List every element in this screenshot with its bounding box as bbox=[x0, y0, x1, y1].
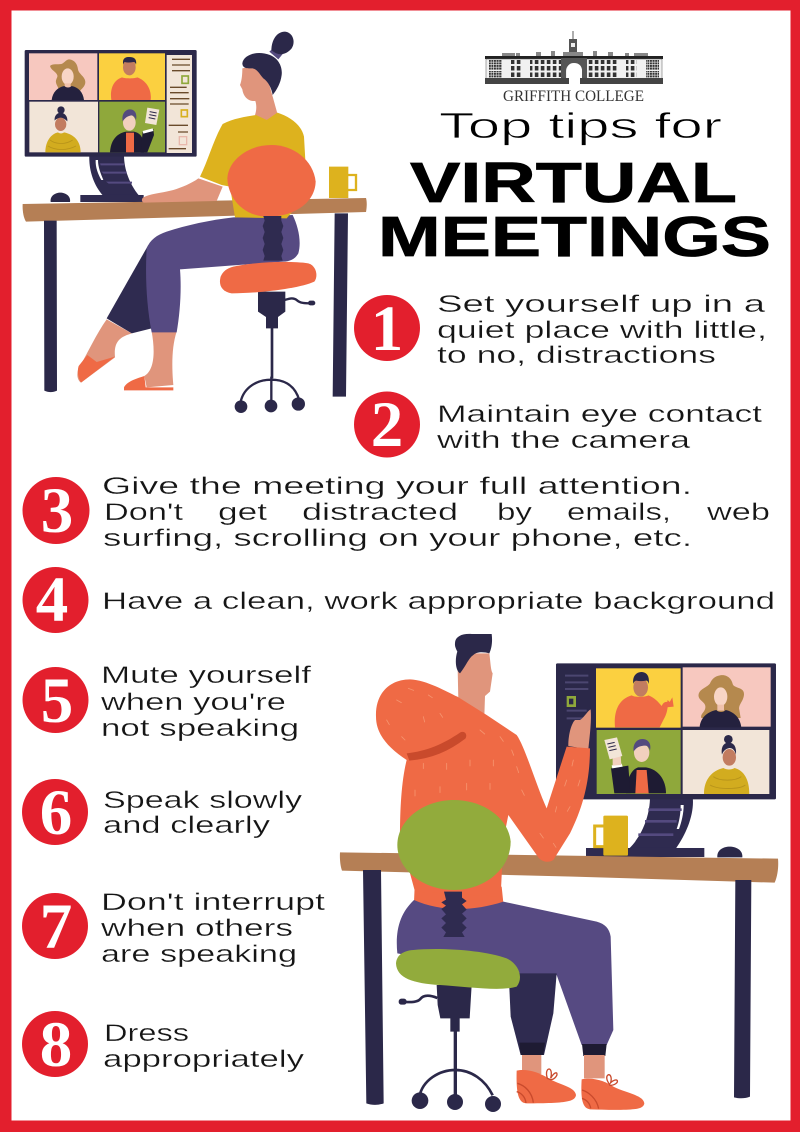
tip 8 bbox=[22, 1009, 304, 1081]
tip 1 text: quiet place with little, bbox=[437, 317, 767, 344]
number badge 5: 5 bbox=[41, 665, 73, 737]
tip 3 text: distracted bbox=[302, 499, 458, 526]
tip 3 bbox=[22, 473, 770, 552]
tip 2 text: with the camera bbox=[436, 427, 691, 454]
chair bbox=[396, 892, 520, 1112]
tip 5 text: not speaking bbox=[101, 715, 299, 742]
tip 7 text bbox=[100, 889, 325, 968]
number badge 8 bbox=[22, 1009, 88, 1081]
illustration: woman at desk on video call bbox=[23, 32, 367, 413]
number badge 7 bbox=[22, 891, 88, 963]
tip 1 bbox=[354, 291, 767, 369]
icon: mouse bbox=[717, 847, 742, 857]
tip 2 text bbox=[436, 401, 762, 454]
tip 3 text: surfing, scrolling on your phone, etc. bbox=[103, 525, 692, 552]
tip 7 text: when others bbox=[100, 915, 293, 942]
number badge 2: 2 bbox=[371, 389, 403, 461]
icon: college building bbox=[485, 31, 663, 84]
tip 3 text: get bbox=[218, 499, 267, 526]
number badge 4: 4 bbox=[36, 564, 68, 636]
number badge 1: 1 bbox=[371, 293, 403, 365]
tip 1 text bbox=[437, 291, 767, 369]
tip 8 text: appropriately bbox=[103, 1046, 304, 1073]
tip 3 text bbox=[102, 473, 770, 552]
number badge 3: 3 bbox=[41, 475, 73, 547]
icon: mouse bbox=[51, 193, 70, 202]
number badge 4 bbox=[22, 564, 88, 636]
title line: MEETINGS: MEETINGS bbox=[378, 205, 771, 269]
chair bbox=[220, 216, 316, 413]
tip 7 text: Don't interrupt bbox=[101, 889, 325, 916]
tip 1 text: Set yourself up in a bbox=[437, 291, 766, 318]
tip 6 text bbox=[103, 787, 302, 839]
tip 6 bbox=[22, 777, 302, 849]
tip 3 text: Don't bbox=[104, 499, 183, 526]
title line: Top tips for: Top tips for bbox=[439, 105, 722, 146]
number badge 5 bbox=[22, 665, 88, 737]
tip 8 text bbox=[103, 1020, 304, 1073]
tip 3 text: by bbox=[497, 499, 532, 526]
number badge 6 bbox=[22, 777, 88, 849]
tip 3 text: emails, bbox=[567, 499, 671, 526]
tip 4 bbox=[22, 564, 775, 636]
icon: monitor stand bbox=[80, 155, 144, 202]
icon: monitor with video call bbox=[556, 663, 776, 799]
tip 3 text: web bbox=[706, 499, 770, 526]
tip 5 text bbox=[100, 662, 311, 742]
tip 2 text: Maintain eye contact bbox=[437, 401, 762, 428]
tip 5 bbox=[22, 662, 311, 742]
woman figure bbox=[77, 32, 316, 390]
icon: desk bbox=[340, 852, 778, 1105]
illustration: man at desk on video call bbox=[340, 634, 778, 1112]
title bbox=[378, 105, 771, 269]
logo wordmark: GRIFFITH COLLEGE bbox=[503, 88, 644, 105]
tip 4 text: Have a clean, work appropriate background bbox=[102, 588, 775, 615]
logo: Griffith College bbox=[485, 31, 663, 105]
number badge 8: 8 bbox=[40, 1009, 72, 1081]
number badge 7: 7 bbox=[40, 891, 72, 963]
title line: VIRTUAL: VIRTUAL bbox=[410, 151, 737, 215]
tip 5 text: Mute yourself bbox=[101, 662, 311, 689]
icon: monitor with video call bbox=[25, 50, 197, 157]
tip 1 text: to no, distractions bbox=[437, 342, 716, 369]
icon: mug bbox=[595, 816, 628, 856]
icon: desk bbox=[23, 198, 367, 397]
tip 3 text: Give the meeting your full attention. bbox=[102, 473, 692, 500]
number badge 6: 6 bbox=[40, 777, 72, 849]
icon: monitor stand bbox=[586, 797, 704, 857]
number badge 2 bbox=[354, 389, 420, 461]
number badge 3 bbox=[22, 475, 90, 547]
icon: mug bbox=[329, 167, 356, 198]
tip 8 text: Dress bbox=[104, 1020, 189, 1047]
tip 6 text: Speak slowly bbox=[103, 787, 302, 814]
number badge 1 bbox=[354, 293, 420, 365]
man figure bbox=[376, 634, 644, 1110]
tip 5 text: when you're bbox=[100, 689, 286, 716]
tip 7 text: are speaking bbox=[101, 941, 297, 968]
tip 6 text: and clearly bbox=[103, 812, 270, 839]
tip 2 bbox=[354, 389, 762, 461]
tip 7 bbox=[22, 889, 325, 968]
